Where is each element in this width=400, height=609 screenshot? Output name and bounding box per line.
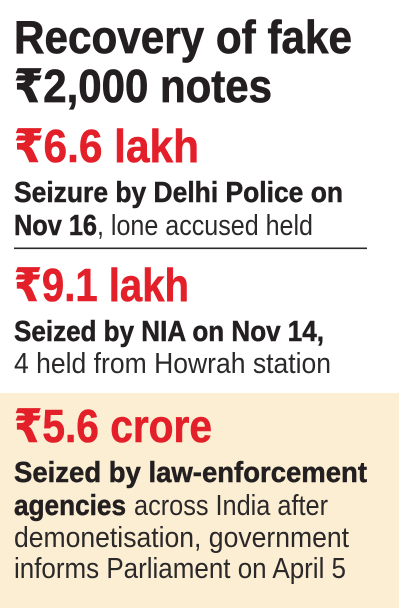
title: ₹2,000 notes — [14, 60, 272, 112]
divider — [14, 248, 367, 249]
text: Delhi Police seizure: Nov 16 — [14, 210, 97, 242]
title: Recovery of fake — [14, 11, 352, 63]
text: law-enforcement seizure: Seized by law-enforcement — [14, 457, 367, 489]
figure: 6.6 lakh: ₹6.6 lakh — [14, 120, 199, 172]
text: law-enforcement seizure: across India after — [134, 490, 328, 522]
text: law-enforcement seizure: agencies — [14, 490, 126, 522]
text: Delhi Police seizure: Seizure by Delhi Police on — [14, 177, 343, 209]
panel: highlighted crore section — [0, 393, 399, 608]
text: NIA seizure — [14, 316, 331, 380]
text: law-enforcement seizure: demonetisation, government — [14, 522, 349, 554]
figure: 9.1 lakh: ₹9.1 lakh — [14, 259, 189, 311]
text: law-enforcement seizure: informs Parliament on April 5 — [14, 553, 346, 585]
text: Delhi Police seizure — [14, 177, 343, 242]
title — [14, 11, 352, 112]
text: NIA seizure: Seized by NIA on Nov 14, — [14, 316, 324, 348]
text: Delhi Police seizure: , lone accused held — [97, 210, 313, 242]
text: NIA seizure: 4 held from Howrah station — [14, 348, 331, 380]
figure: 5.6 crore: ₹5.6 crore — [14, 400, 212, 452]
text: law-enforcement seizure — [14, 457, 367, 585]
